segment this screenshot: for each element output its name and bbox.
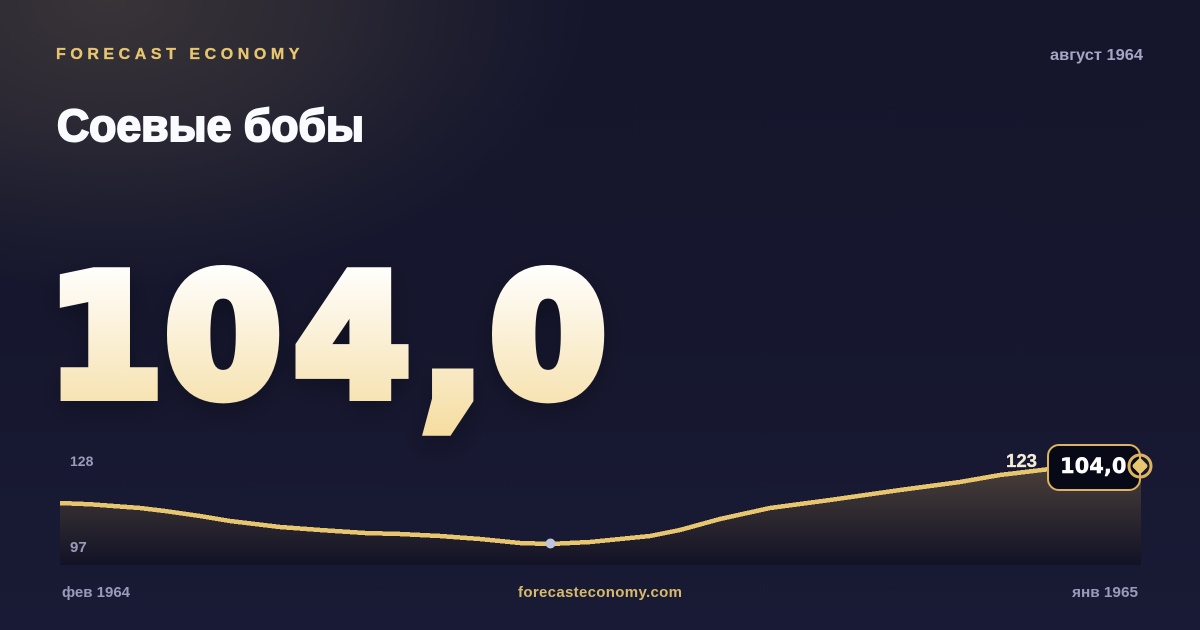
date label: август 1964 [1050, 47, 1143, 64]
minimum marker [546, 538, 556, 548]
current value badge [1048, 445, 1140, 490]
current value badge: 104,0 [1060, 454, 1126, 478]
end date: янв 1965 [1072, 584, 1138, 601]
area chart [60, 466, 1141, 565]
big value: 104,0 [47, 241, 606, 446]
axis max label: 128 [70, 453, 94, 469]
current value marker [1129, 455, 1151, 477]
peak value label: 123 [1006, 451, 1037, 471]
brand label: FORECAST ECONOMY [56, 46, 304, 63]
title: Соевые бобы [57, 100, 364, 151]
chart area fill [60, 466, 1141, 565]
axis min label: 97 [70, 539, 87, 556]
website: forecasteconomy.com [518, 584, 682, 601]
start date: фев 1964 [62, 584, 131, 601]
chart line [60, 469, 1050, 544]
